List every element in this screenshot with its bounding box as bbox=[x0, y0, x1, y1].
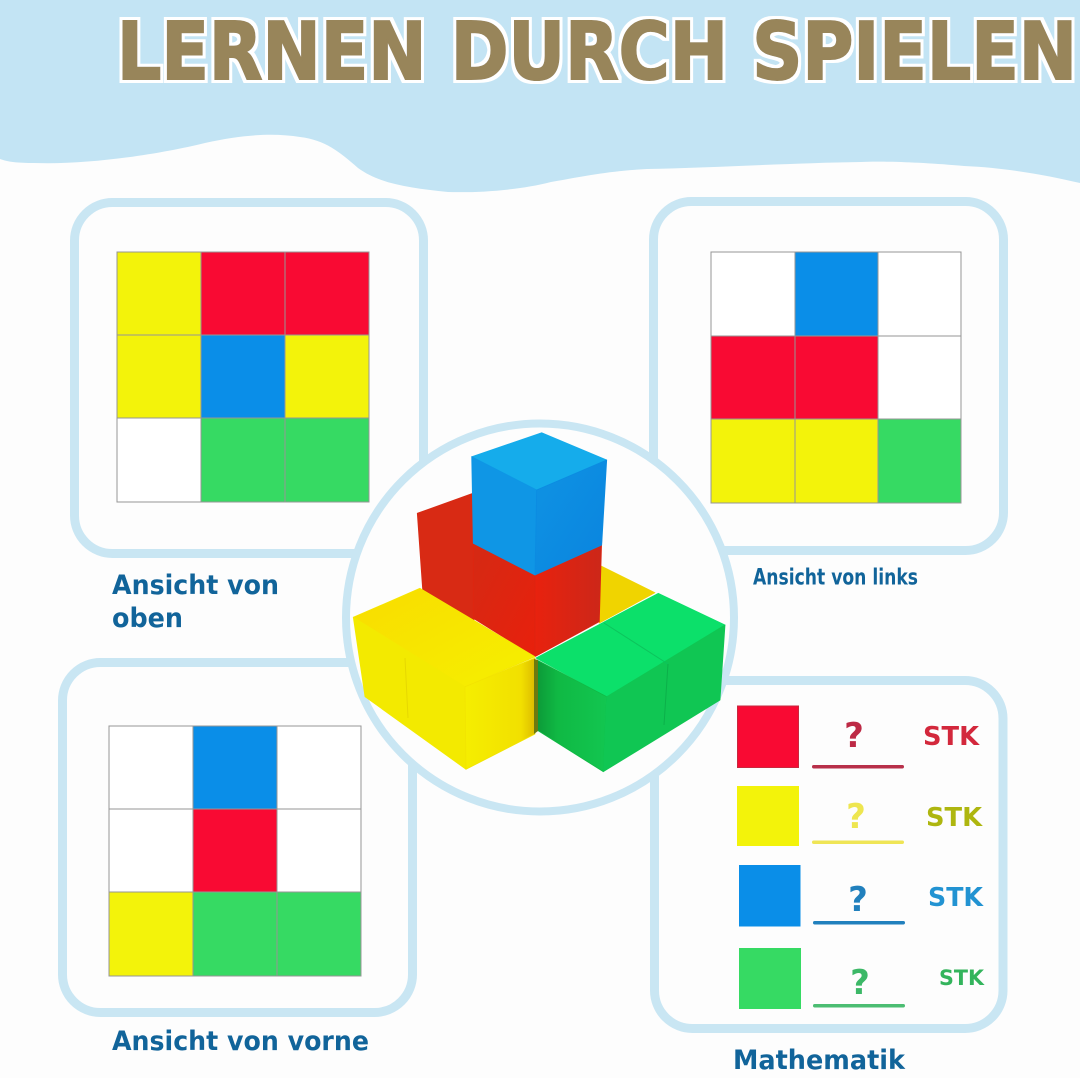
cube: yellow top bbox=[353, 588, 535, 687]
cube: front red left face bbox=[473, 538, 535, 657]
caption: view from above, second line: oben bbox=[112, 603, 183, 634]
cube: yellow left face bbox=[353, 617, 466, 769]
caption: view from the front: Ansicht von vorne bbox=[112, 1026, 369, 1057]
grid: view from the left bbox=[711, 252, 961, 503]
row: green count bbox=[739, 948, 985, 1009]
panel frame bbox=[654, 202, 1004, 550]
row: blue count: ? bbox=[848, 880, 868, 920]
cube: green right face bbox=[603, 625, 725, 772]
row: green count: ? bbox=[850, 963, 870, 1003]
panel: view from the front bbox=[62, 662, 412, 1012]
row: green count: STK bbox=[939, 966, 985, 990]
illustration: stacked cubes bbox=[353, 433, 725, 772]
caption: mathematics: Mathematik bbox=[733, 1045, 906, 1076]
cube: blue top bbox=[472, 433, 607, 490]
panel frame bbox=[62, 662, 412, 1012]
caption: view from above: Ansicht von bbox=[112, 570, 279, 601]
row: blue count bbox=[739, 865, 984, 926]
cube: front red right face bbox=[535, 540, 602, 657]
row: red count: STK bbox=[923, 722, 980, 752]
panel: counting exercise bbox=[654, 680, 1003, 1028]
row: red count: ? bbox=[844, 716, 864, 756]
panel: view from the left bbox=[654, 202, 1004, 550]
cube: blue left face bbox=[472, 457, 537, 575]
grid: view from the front bbox=[109, 726, 361, 976]
row: yellow count bbox=[737, 786, 983, 846]
row: blue count: STK bbox=[928, 883, 984, 913]
panel frame bbox=[74, 202, 424, 554]
cube: back red bbox=[417, 493, 474, 620]
cube: back yellow bbox=[599, 566, 655, 623]
cube: yellow right face bbox=[465, 658, 535, 769]
panel: view from above bbox=[74, 202, 424, 554]
cube: green left face bbox=[537, 660, 607, 772]
cube: green top bbox=[536, 593, 725, 697]
row: yellow count: ? bbox=[846, 797, 866, 837]
row: yellow count: STK bbox=[926, 803, 983, 833]
cube: shadow between yellow and green bbox=[534, 659, 538, 734]
circle: cube photo frame bbox=[346, 424, 734, 812]
row: red count bbox=[738, 706, 980, 768]
cube: blue right face bbox=[535, 460, 607, 575]
cube seams bbox=[405, 623, 668, 725]
header wave band bbox=[0, 0, 1080, 192]
panel frame bbox=[654, 680, 1003, 1028]
grid: view from above bbox=[117, 252, 369, 502]
caption: view from the left: Ansicht von links bbox=[753, 566, 918, 590]
